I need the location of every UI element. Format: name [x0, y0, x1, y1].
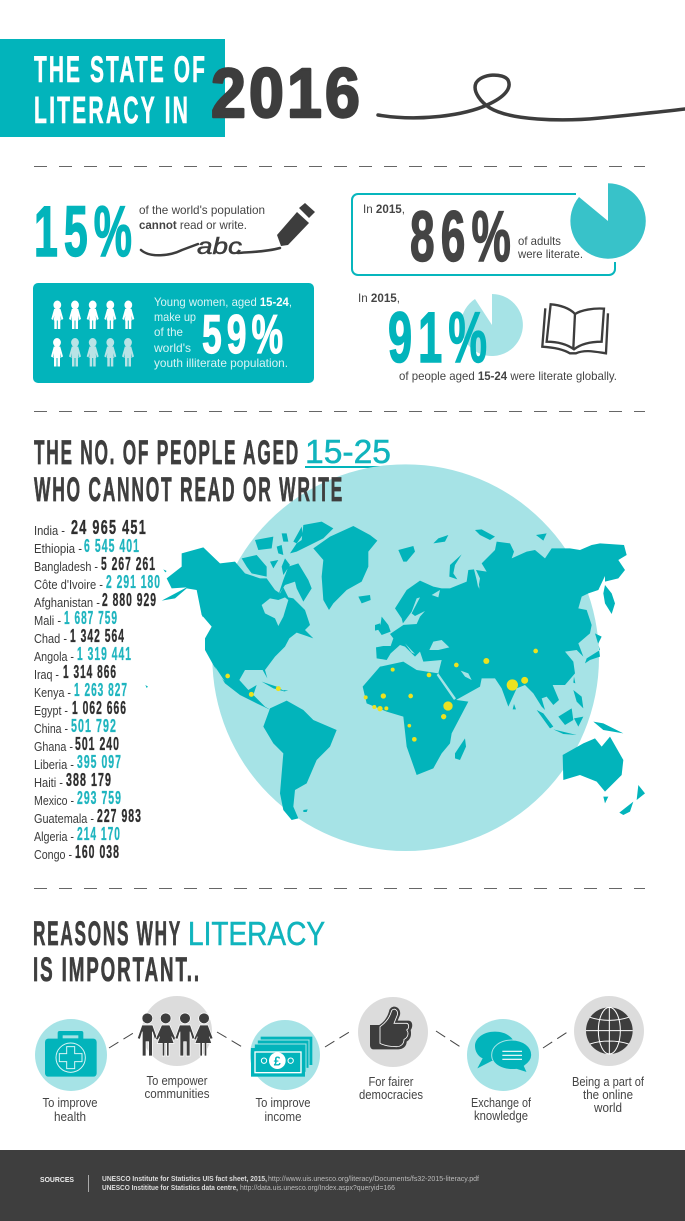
- title year 2016: 2016: [211, 54, 363, 132]
- panel: young women 59 percent: make up: [154, 310, 196, 324]
- title looping line: [378, 75, 685, 120]
- icon: medical case: [45, 1031, 97, 1077]
- reason: health: To improve: [42, 1096, 98, 1110]
- panel: 86 percent of adults: of adults: [518, 234, 561, 248]
- stat: 91 percent of youth: In 2015,: [358, 291, 400, 305]
- handwriting abc: abc: [197, 233, 243, 259]
- map section heading: [34, 433, 392, 472]
- reason: knowledge: knowledge: [474, 1109, 528, 1123]
- stat: 15 percent: of the world's population: [139, 203, 265, 217]
- country list: Congo -: [34, 847, 72, 862]
- country list: Guatemala -: [34, 811, 94, 826]
- icon: thumbs up: [370, 1007, 412, 1049]
- footer: sources: http://data.uis.unesco.org/Index.aspx?queryid=166: [240, 1185, 395, 1192]
- icon: open book: [542, 304, 608, 353]
- country list: Chad -: [34, 631, 67, 646]
- panel: young women 59 percent: of the: [154, 325, 183, 339]
- reason: online world: the online: [583, 1088, 633, 1102]
- panel: young women 59 percent: Young women, aged 15-24,: [154, 295, 292, 309]
- reason: income: To improve: [256, 1096, 311, 1110]
- country list: 160 038: [75, 842, 120, 862]
- country list: 388 179: [66, 770, 112, 790]
- country list: China -: [34, 721, 68, 736]
- seas: [402, 573, 480, 700]
- map section heading: THE NO. OF PEOPLE AGED: [34, 434, 300, 472]
- reasons heading: REASONS WHY: [33, 915, 182, 953]
- reason: income: [250, 1020, 320, 1124]
- footer: sources: UNESCO Instititue for Statistics data centre,: [102, 1185, 238, 1192]
- country list: 5 267 261: [101, 554, 156, 574]
- country list: Iraq -: [34, 667, 59, 682]
- footer: sources: [0, 1150, 685, 1221]
- title banner: THE STATE OF: [34, 49, 207, 90]
- pie chart: 91 percent: [461, 294, 523, 356]
- country list: Haiti -: [34, 775, 63, 790]
- reason: democracies: [358, 997, 428, 1102]
- country list: 1 062 666: [72, 698, 127, 718]
- country list: 214 170: [77, 824, 121, 844]
- panel: young women 59 percent: world's: [153, 341, 191, 355]
- reasons heading: LITERACY: [188, 915, 325, 952]
- reason: health: health: [54, 1110, 86, 1124]
- title banner: [0, 39, 225, 137]
- panel: young women 59 percent: 59%: [202, 303, 288, 365]
- country list: 227 983: [97, 806, 142, 826]
- footer: sources: SOURCES: [40, 1177, 74, 1184]
- country list: Ethiopia -: [34, 541, 82, 556]
- reason: income: income: [264, 1110, 302, 1124]
- reason: online world: Being a part of: [572, 1075, 644, 1089]
- panel: 86 percent of adults: [352, 183, 646, 277]
- country list: Mali -: [34, 613, 61, 628]
- country list: Algeria -: [34, 829, 74, 844]
- reasons heading: IS IMPORTANT..: [33, 951, 201, 989]
- world map: [145, 464, 645, 851]
- handwriting abc: [141, 233, 280, 259]
- country list: Angola -: [34, 649, 74, 664]
- reason: online world: world: [593, 1101, 622, 1115]
- country list: Egypt -: [34, 703, 68, 718]
- country list: Kenya -: [34, 685, 71, 700]
- country list: Bangladesh -: [34, 559, 98, 574]
- pie chart: 86 percent: [570, 183, 646, 259]
- reason: knowledge: [467, 1019, 539, 1123]
- country list: 1 687 759: [64, 608, 118, 628]
- stat: 91 percent of youth: [358, 291, 617, 383]
- icon: banknotes: £: [274, 1054, 281, 1068]
- reason: democracies: democracies: [359, 1088, 423, 1102]
- stat: 15 percent: 15%: [34, 193, 138, 272]
- country list: 24 965 451: [71, 517, 147, 539]
- icon: pen: [277, 203, 315, 246]
- country list: Ghana -: [34, 739, 73, 754]
- footer: sources: http://www.uis.unesco.org/literacy/Documents/fs32-2015-literacy.pdf: [268, 1176, 479, 1183]
- panel: young women 59 percent: [33, 283, 314, 383]
- land: the Americas and Greenland: [162, 522, 377, 710]
- country list: 1 263 827: [74, 680, 128, 700]
- panel: 86 percent of adults: In 2015,: [363, 202, 405, 216]
- country list: 293 759: [77, 788, 122, 808]
- icon: people holding hands: [137, 1013, 213, 1056]
- country list: 395 097: [77, 752, 122, 772]
- data dots: [225, 649, 538, 742]
- country list: Afghanistan -: [34, 595, 100, 610]
- country list: Côte d'Ivoire -: [34, 577, 103, 592]
- footer: sources: UNESCO Institute for Statistics UIS fact sheet, 2015,: [102, 1176, 267, 1183]
- country list: 1 319 441: [77, 644, 132, 664]
- reason: knowledge: Exchange of: [471, 1096, 531, 1110]
- icon: speech bubbles: [475, 1032, 532, 1073]
- country list: Liberia -: [34, 757, 74, 772]
- country list: [34, 517, 161, 862]
- reason: communities: [137, 996, 213, 1101]
- land: Eurasia: [375, 529, 627, 735]
- country list: 2 880 929: [102, 590, 157, 610]
- reason: online world: [572, 996, 644, 1115]
- stat: 91 percent of youth: 91%: [388, 299, 493, 378]
- panel: 86 percent of adults: 86%: [410, 198, 517, 277]
- panel: young women 59 percent: youth illiterate population.: [154, 356, 288, 370]
- stat: 15 percent: [34, 193, 315, 272]
- country list: 1 342 564: [70, 626, 125, 646]
- reason: health: [35, 1019, 107, 1124]
- reason: communities: communities: [144, 1087, 210, 1101]
- country list: 501 792: [71, 716, 117, 736]
- title banner: LITERACY IN: [34, 90, 190, 132]
- map section heading second line: WHO CANNOT READ OR WRITE: [34, 471, 344, 509]
- reason: democracies: For fairer: [368, 1075, 414, 1089]
- stat: 15 percent: cannot read or write.: [139, 218, 247, 232]
- country list: Mexico -: [34, 793, 74, 808]
- country list: 501 240: [75, 734, 120, 754]
- country list: 2 291 180: [106, 572, 161, 592]
- icon: women pictogram: [51, 300, 134, 366]
- country list: 6 545 401: [84, 536, 140, 556]
- reasons heading: [33, 915, 325, 989]
- globe: [212, 464, 599, 851]
- stat: 91 percent of youth: of people aged 15-24 were literate globally.: [399, 369, 617, 383]
- icon: globe: [586, 1007, 633, 1054]
- map section heading: 15-25: [305, 433, 391, 470]
- panel: 86 percent of adults: were literate.: [517, 247, 583, 261]
- country list: India -: [34, 523, 65, 538]
- reason: communities: To empower: [146, 1074, 208, 1088]
- country list: 1 314 866: [63, 662, 117, 682]
